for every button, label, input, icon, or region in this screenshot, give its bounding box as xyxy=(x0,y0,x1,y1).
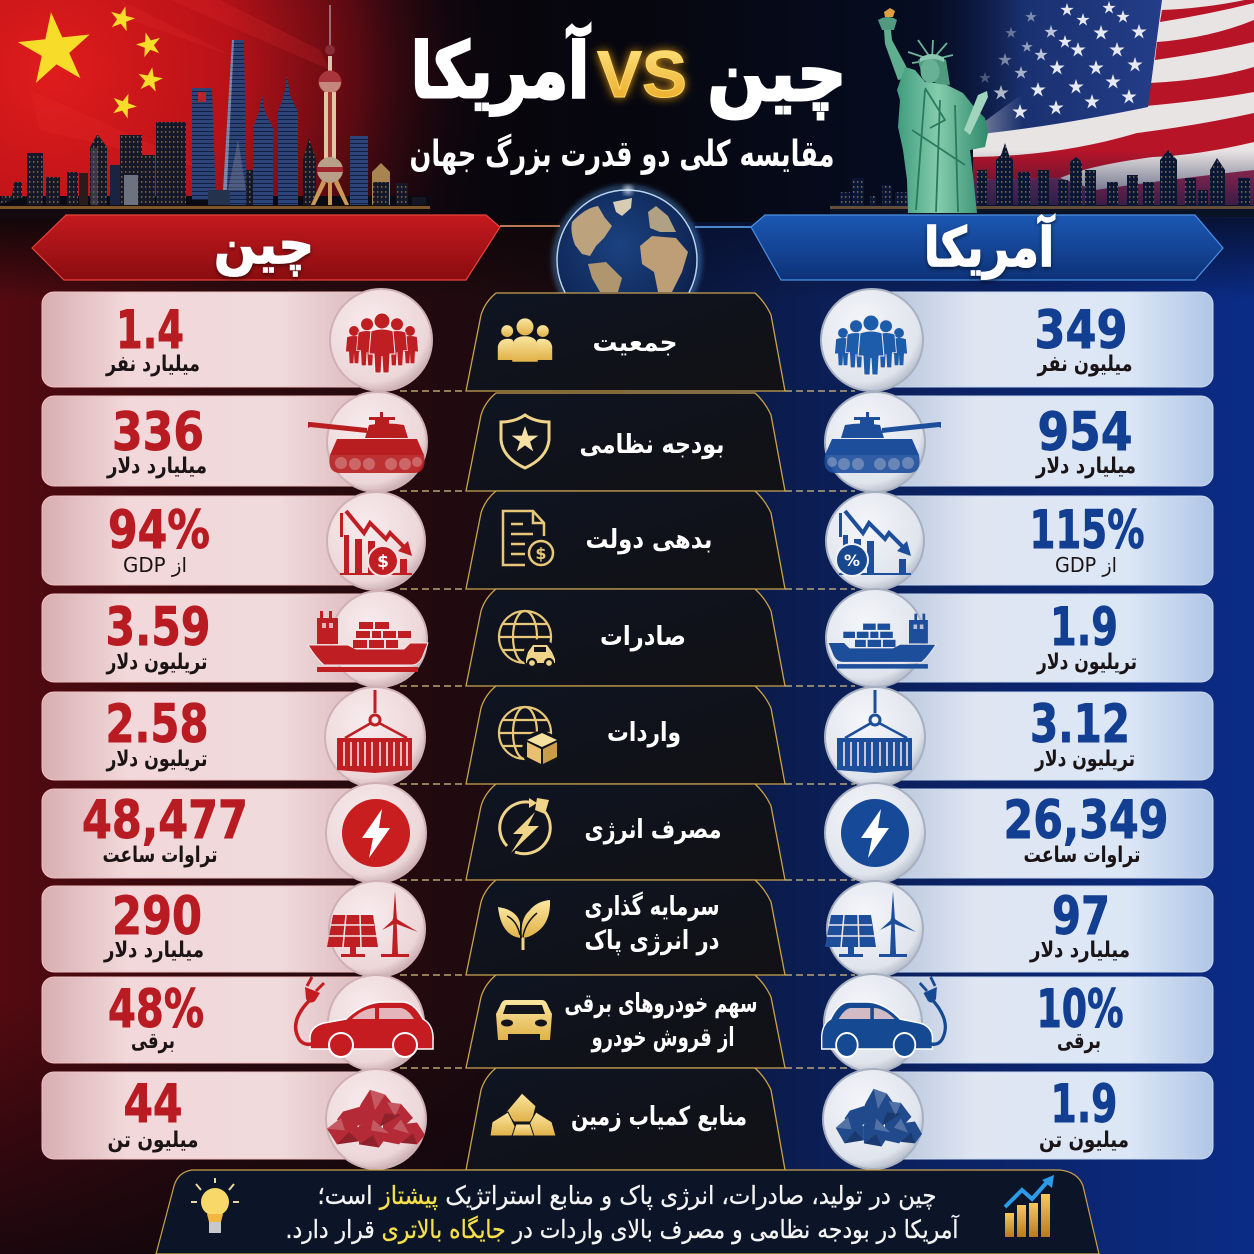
us flag xyxy=(930,0,1254,218)
label: rare earths: منابع کمیاب زمین xyxy=(571,1102,747,1132)
banner: america xyxy=(751,214,1223,280)
unit: تراوات ساعت xyxy=(102,843,218,868)
icon: energy cycle xyxy=(500,798,550,854)
unit: از GDP xyxy=(1055,553,1117,577)
icon: shield xyxy=(501,415,549,468)
unit: تریلیون دلار xyxy=(106,650,208,675)
unit: از GDP xyxy=(123,553,187,577)
icon: tank red xyxy=(308,412,425,473)
icon: people blue xyxy=(835,315,907,375)
icon: ship blue xyxy=(828,614,936,669)
icon: people xyxy=(498,318,552,362)
china column xyxy=(42,289,433,1169)
title xyxy=(411,24,846,119)
icon: people red xyxy=(346,313,418,373)
icon: container red xyxy=(337,690,412,773)
label: ev share xyxy=(564,989,758,1053)
icon: electric car red xyxy=(296,977,433,1057)
icon: tank blue xyxy=(824,412,941,473)
value: 349 xyxy=(1034,300,1128,361)
label: ev share: سهم خودروهای برقی xyxy=(564,989,758,1019)
row: imports china xyxy=(42,687,425,787)
unit: میلیارد دلار xyxy=(1035,454,1136,479)
land: north america xyxy=(571,206,612,256)
unit: میلیون تن xyxy=(108,1128,198,1153)
icon: debt chart blue: % xyxy=(844,551,860,570)
icon: leaf xyxy=(498,900,550,950)
unit: میلیارد دلار xyxy=(103,938,204,963)
unit: تراوات ساعت xyxy=(1024,843,1140,868)
row: energy america xyxy=(825,783,1213,883)
label: military budget: بودجه نظامی xyxy=(580,430,724,460)
row: clean investment america xyxy=(825,881,1213,977)
center labels xyxy=(564,328,758,1132)
icon: globe with car xyxy=(499,611,557,673)
new york skyline xyxy=(830,143,1254,217)
row: military china xyxy=(42,392,427,492)
icon: globe with box xyxy=(499,707,560,769)
value: 44 xyxy=(124,1074,182,1135)
land: africa xyxy=(640,236,688,292)
label: energy consumption: مصرف انرژی xyxy=(584,815,722,845)
icon: debt chart blue xyxy=(836,511,911,576)
header band xyxy=(0,0,1254,222)
background: china half xyxy=(0,0,627,1254)
icon: debt chart red: $ xyxy=(377,552,389,572)
icon: ship red xyxy=(308,611,428,672)
shanghai skyline xyxy=(0,5,430,219)
label: government debt: بدهی دولت xyxy=(586,525,712,555)
row: imports america xyxy=(825,687,1213,787)
value: 290 xyxy=(112,886,202,947)
row: ev america xyxy=(822,974,1213,1072)
statue of liberty xyxy=(878,8,988,213)
china flag xyxy=(0,0,520,216)
row: population china xyxy=(42,289,432,391)
icon: solar and wind blue xyxy=(825,891,916,957)
row: clean investment china xyxy=(42,881,425,977)
unit: برقی xyxy=(131,1029,175,1054)
unit: تریلیون دلار xyxy=(1036,650,1137,675)
banner: china xyxy=(32,213,500,280)
unit: برقی xyxy=(1057,1029,1101,1054)
flag stars xyxy=(15,3,164,120)
row: exports china xyxy=(42,591,428,687)
row: ev china xyxy=(42,975,433,1071)
unit: تریلیون دلار xyxy=(1034,747,1135,772)
row: population america xyxy=(821,289,1213,391)
icon: document with dollar: $ xyxy=(535,544,547,563)
land: greenland xyxy=(613,198,632,216)
icon: bolt red xyxy=(342,799,410,867)
label: clean energy investment xyxy=(584,891,720,956)
value: 97 xyxy=(1052,886,1110,947)
footer callout xyxy=(156,1170,1099,1254)
label: exports: صادرات xyxy=(600,622,686,652)
icon: container blue xyxy=(837,690,912,773)
value: 3.12 xyxy=(1030,694,1130,755)
value: 115% xyxy=(1030,500,1144,561)
value: 94% xyxy=(108,500,210,561)
value: 3.59 xyxy=(106,597,210,658)
row: exports america xyxy=(826,589,1213,687)
icon: rocks blue xyxy=(836,1089,922,1147)
title: vs: VS xyxy=(597,37,687,111)
icon: solar and wind red xyxy=(327,891,418,957)
icon: light bulb xyxy=(191,1178,239,1233)
value: 2.58 xyxy=(106,694,208,755)
value: 48% xyxy=(108,979,204,1040)
unit: میلیارد دلار xyxy=(1029,938,1130,963)
subtitle: مقایسه کلی دو قدرت بزرگ جهان xyxy=(410,132,834,175)
canton stars xyxy=(979,1,1147,118)
center panels xyxy=(400,293,855,1170)
value: 1.4 xyxy=(116,300,184,361)
icon: debt chart red xyxy=(340,511,412,576)
row: debt china xyxy=(42,492,425,590)
row: debt america xyxy=(826,492,1213,590)
background: america half xyxy=(627,0,1254,1254)
value: 954 xyxy=(1038,402,1132,463)
gold icons xyxy=(490,318,560,1136)
land: south america xyxy=(588,262,622,292)
row: rare earth america xyxy=(823,1069,1213,1169)
row: military america xyxy=(824,392,1213,492)
label: clean energy investment: سرمایه گذاری xyxy=(584,891,720,922)
label: population: جمعیت xyxy=(592,328,678,358)
icon: rising bar chart xyxy=(1005,1175,1054,1237)
value: 48,477 xyxy=(82,790,248,851)
banner text: america: آمریکا xyxy=(924,214,1055,279)
icon: car front xyxy=(496,1000,552,1040)
title: china: چین xyxy=(708,29,846,119)
row: rare earth china xyxy=(42,1069,426,1169)
footer text line 1: چین در تولید، صادرات، انرژی پاک و منابع استراتژیک پیشتاز است؛ xyxy=(318,1181,936,1211)
icon: electric car blue xyxy=(822,977,945,1057)
value: 1.9 xyxy=(1050,1074,1118,1135)
banner text: china: چین xyxy=(214,213,314,276)
value: 1.9 xyxy=(1050,597,1118,658)
globe xyxy=(500,186,751,332)
icon: gold nuggets xyxy=(490,1093,556,1136)
canton xyxy=(930,0,1162,140)
icon: bolt blue xyxy=(841,799,909,867)
footer text line 2: آمریکا در بودجه نظامی و مصرف بالای واردات در جایگاه بالاتری قرار دارد. xyxy=(286,1214,959,1245)
value: 26,349 xyxy=(1004,790,1168,851)
icon: rocks red xyxy=(327,1090,425,1148)
land: europe xyxy=(648,206,676,232)
value: 336 xyxy=(112,402,204,463)
icon: document with dollar xyxy=(503,511,553,565)
unit: میلیارد دلار xyxy=(106,454,207,479)
label: ev share: از قروش خودرو xyxy=(590,1023,734,1053)
value: 10% xyxy=(1036,979,1124,1040)
unit: میلیارد نفر xyxy=(105,352,200,377)
title: america: آمریکا xyxy=(411,24,591,116)
row: energy china xyxy=(42,783,426,883)
label: clean energy investment: در انرژی پاک xyxy=(584,926,720,956)
unit: میلیون تن xyxy=(1039,1128,1129,1153)
unit: تریلیون دلار xyxy=(106,747,208,772)
unit: میلیون نفر xyxy=(1037,352,1132,377)
title: vs glow: VS xyxy=(597,37,687,111)
label: imports: واردات xyxy=(607,718,681,748)
america column xyxy=(821,289,1213,1169)
